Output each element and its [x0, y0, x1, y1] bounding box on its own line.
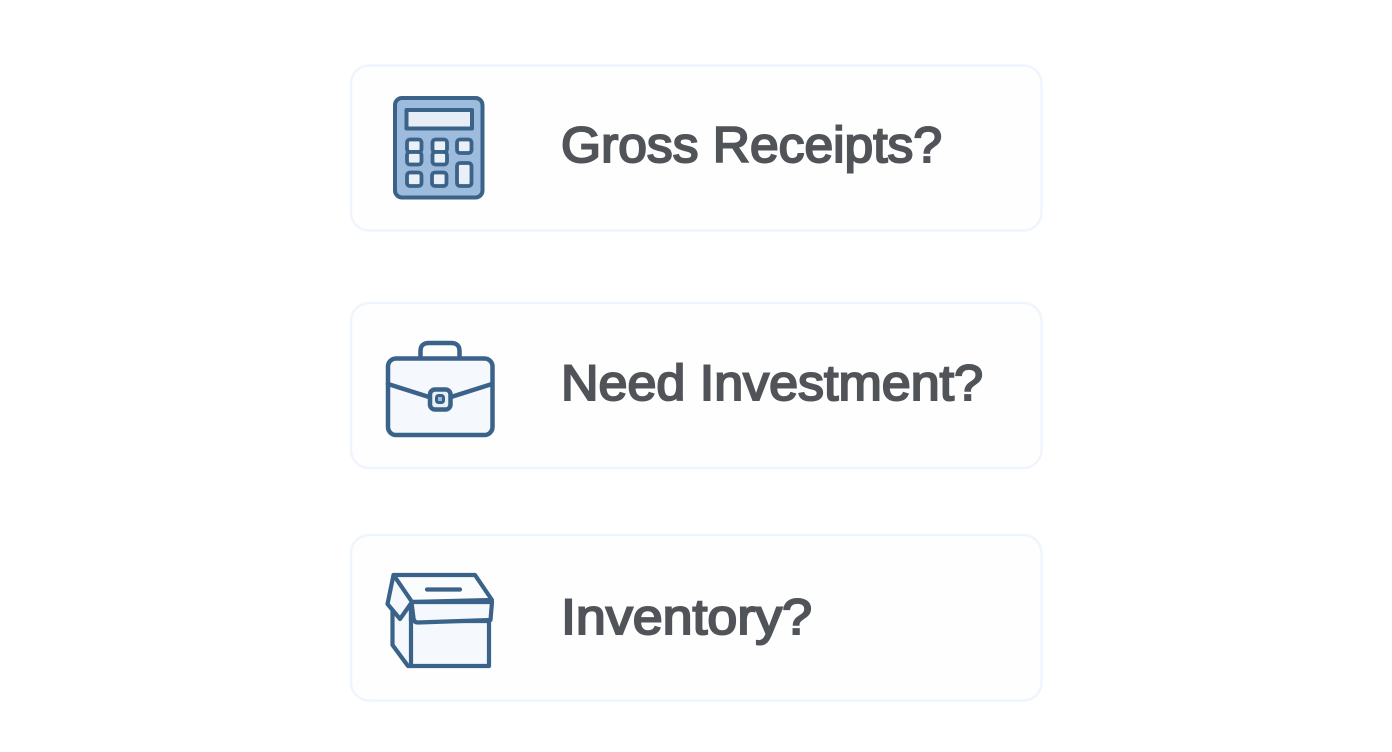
label: gross receipts: Gross Receipts?: [561, 117, 942, 173]
panel: inventory: [351, 535, 1042, 700]
panel: need investment: [351, 303, 1042, 468]
icon: briefcase: [388, 343, 492, 435]
icon: box: [388, 575, 492, 666]
panel: gross receipts: [351, 66, 1042, 230]
label: need investment: Need Investment?: [561, 355, 983, 411]
card background: need investment: [351, 303, 1042, 468]
card background: gross receipts: [351, 66, 1042, 230]
card background: inventory: [351, 535, 1042, 700]
icon: calculator: [395, 98, 482, 198]
label: inventory: Inventory?: [561, 589, 812, 645]
